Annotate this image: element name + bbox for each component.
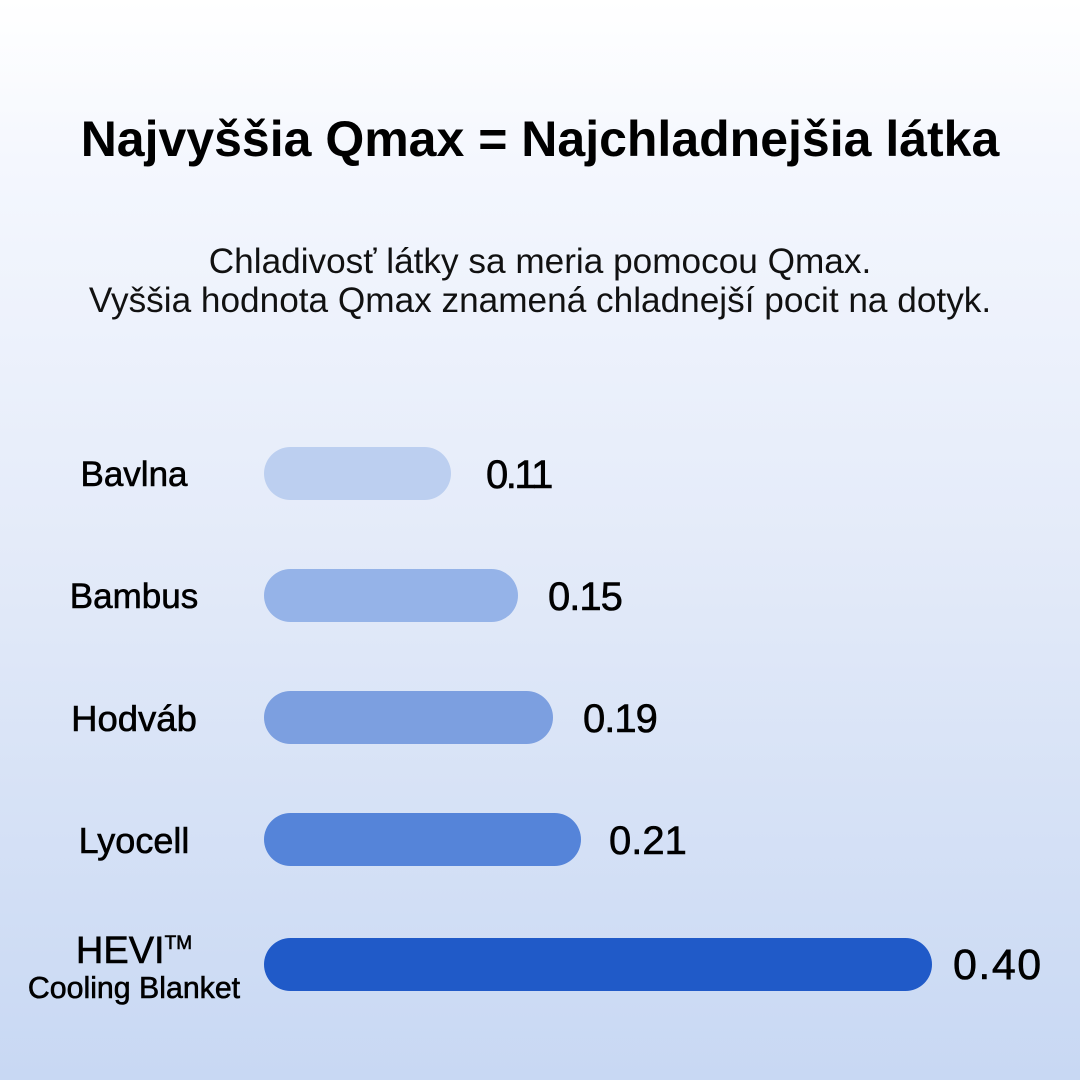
label: HEVI Cooling Blanket: Cooling Blanket bbox=[28, 972, 240, 1005]
label: Hodváb: Hodváb bbox=[71, 698, 197, 739]
value: 0.40: 0.40 bbox=[953, 941, 1043, 989]
bar: Bambus bbox=[264, 569, 518, 622]
bar: HEVI bbox=[264, 938, 932, 991]
title: Najvyššia Qmax = Najchladnejšia látka bbox=[81, 111, 999, 167]
label: Bambus: Bambus bbox=[70, 577, 198, 616]
bar: Lyocell bbox=[264, 813, 581, 866]
label: Bavlna: Bavlna bbox=[80, 455, 188, 494]
subtitle text: Chladivosť látky sa meria pomocou Qmax. bbox=[209, 242, 871, 281]
row: HEVI Cooling Blanket bbox=[28, 930, 1043, 1005]
bar: Bavlna bbox=[264, 447, 451, 500]
value: 0.15: 0.15 bbox=[548, 575, 622, 619]
bar: Hodváb bbox=[264, 691, 553, 744]
label: Lyocell: Lyocell bbox=[79, 820, 189, 861]
label: HEVI Cooling Blanket: HEVITM bbox=[76, 930, 192, 972]
row: Lyocell bbox=[79, 813, 687, 866]
row: Hodváb bbox=[71, 691, 657, 744]
bar chart bbox=[28, 447, 1043, 1005]
row: Bambus bbox=[70, 569, 622, 622]
subtitle text bbox=[89, 242, 991, 320]
value: 0.21: 0.21 bbox=[609, 819, 687, 863]
row: Bavlna bbox=[80, 447, 552, 500]
label: HEVI Cooling Blanket bbox=[28, 930, 240, 1005]
value: 0.11: 0.11 bbox=[486, 453, 551, 497]
subtitle text: Vyššia hodnota Qmax znamená chladnejší pocit na dotyk. bbox=[89, 281, 991, 320]
value: 0.19: 0.19 bbox=[583, 697, 657, 741]
